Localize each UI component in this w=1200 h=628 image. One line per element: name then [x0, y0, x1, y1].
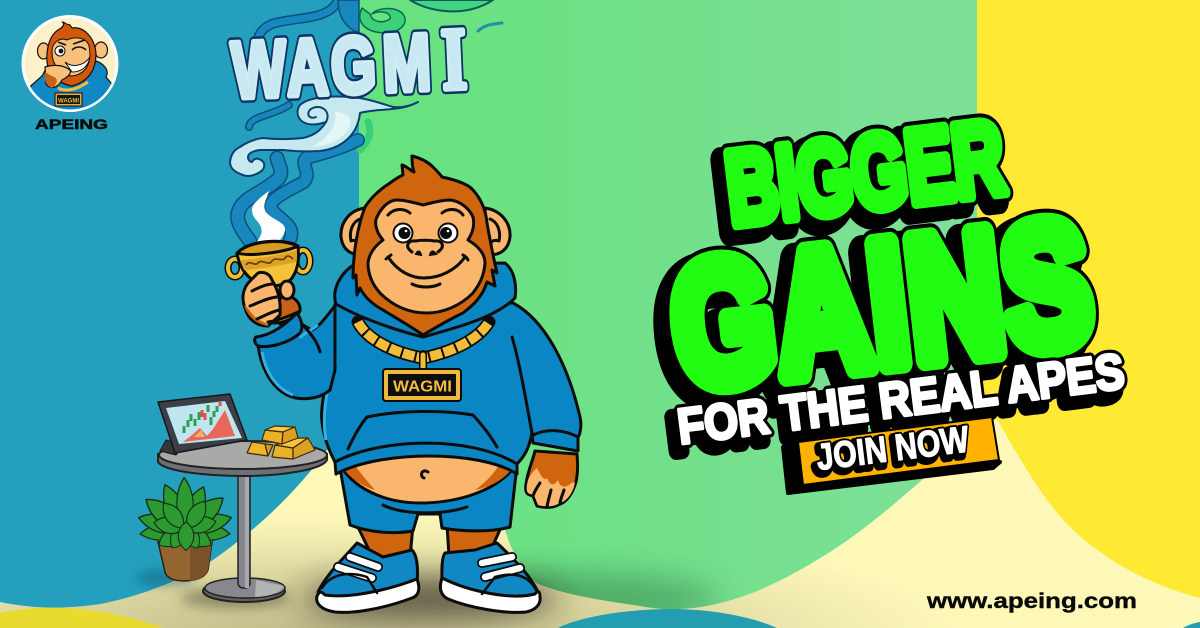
headline: BIGGER: BIGGER — [720, 98, 1011, 247]
hoodie details — [324, 337, 578, 464]
thumb — [280, 281, 294, 299]
headline: BIGGER: BIGGER — [713, 106, 1003, 255]
panel: yellow background — [977, 0, 1200, 598]
heading: WAGMI smoke lettering — [230, 10, 469, 117]
logo wordmark: APEING — [35, 116, 108, 132]
logo monkey illustration: WAGMI — [58, 98, 79, 104]
wisp: left steam strand — [238, 158, 281, 241]
hood — [335, 263, 516, 337]
cup rim — [237, 242, 298, 254]
tablet — [158, 394, 247, 455]
pot — [158, 535, 213, 581]
logo: APEING badge — [23, 16, 120, 132]
shorts — [340, 465, 517, 533]
chain plate — [383, 369, 461, 401]
headline: FOR THE REAL APES: FOR THE REAL APES — [674, 343, 1127, 455]
golden cup — [228, 241, 310, 315]
headline: GAINS: GAINS — [652, 193, 1093, 434]
button label: JOIN NOW — [814, 419, 971, 479]
cup band — [240, 250, 297, 270]
headline: FOR THE REAL APES: FOR THE REAL APES — [667, 351, 1120, 463]
shadow: ground shadow under feet — [300, 578, 560, 618]
WAGMI fill layer: WAGMI — [230, 10, 469, 117]
button face — [798, 417, 999, 485]
headline: FOR THE REAL APES: FOR THE REAL APES — [674, 343, 1127, 455]
wisp: upper blob left — [338, 0, 359, 33]
leaves — [136, 477, 234, 552]
panel: green background — [359, 0, 977, 609]
character: ape in blue hoodie — [228, 156, 581, 612]
cup stem — [273, 280, 283, 315]
shape: yellow bottom-left blob — [0, 608, 163, 628]
right hand — [526, 451, 578, 507]
cup foot — [268, 312, 298, 323]
shape: teal bottom-right corner — [1183, 622, 1200, 628]
wisp: top right swirl — [410, 0, 493, 11]
shape: teal bottom blob — [558, 609, 777, 628]
plant in pot — [136, 477, 234, 581]
smoke: big light swirl — [230, 96, 418, 176]
chart: red mountain — [183, 410, 235, 442]
button shadow — [783, 440, 1000, 493]
right shoe — [440, 543, 540, 612]
headline: BIGGER: BIGGER — [720, 98, 1011, 247]
face — [368, 200, 485, 313]
smoke: inner spiral — [308, 107, 328, 122]
left shoe — [317, 543, 419, 612]
legs — [357, 525, 502, 560]
left ear — [341, 208, 365, 254]
panel: blue background — [0, 0, 359, 608]
hand back patch — [276, 296, 300, 324]
wisp: small mid strand — [249, 105, 289, 127]
head fur — [353, 156, 497, 335]
chain plate: WAGMI — [393, 378, 452, 396]
finger lines — [250, 284, 279, 319]
fist shade — [244, 305, 268, 326]
smile — [386, 255, 468, 287]
wisp: green lower strand — [360, 122, 370, 150]
brows — [388, 209, 463, 215]
website url: www.apeing.com — [926, 590, 1137, 613]
right ear — [485, 208, 510, 254]
WAGMI outline layer: WAGMI — [230, 10, 469, 117]
button label: JOIN NOW — [814, 419, 971, 479]
cup bowl — [237, 241, 298, 286]
cup handles — [228, 250, 310, 277]
steam: white core — [252, 191, 285, 243]
wisp: right steam strand — [271, 140, 358, 240]
headline: GAINS: GAINS — [662, 183, 1103, 425]
smoke: steam wisps rising from cup — [230, 0, 502, 243]
wisp: upper left strand — [257, 0, 338, 55]
wisp: small right stroke — [478, 23, 502, 31]
button: JOIN NOW — [783, 417, 1000, 493]
hand holding cup — [243, 272, 300, 326]
gold bars — [247, 426, 315, 459]
raised arm — [258, 306, 335, 399]
smoke: swirl highlight — [312, 112, 350, 147]
shadow: green ground shadow — [518, 558, 726, 610]
table stand — [203, 472, 285, 602]
headline block — [652, 98, 1127, 493]
shadow: cream floor shading — [0, 500, 1200, 628]
logo circle — [23, 16, 117, 110]
table with tablet and gold — [158, 394, 327, 602]
headline: GAINS: GAINS — [662, 183, 1103, 425]
gold chain — [358, 322, 489, 370]
hoodie body — [322, 303, 581, 474]
fist — [243, 272, 280, 326]
shadow: table base shadow — [180, 588, 290, 608]
shadow: plant pot shadow — [135, 572, 195, 584]
table top — [158, 441, 327, 476]
chart: candles — [184, 402, 220, 433]
belly — [342, 453, 512, 503]
button label: JOIN NOW — [811, 422, 968, 482]
eyes — [394, 224, 458, 242]
sleeve cuff — [255, 313, 302, 346]
wisp: green swirl — [360, 8, 405, 33]
pot shading — [190, 535, 213, 581]
shorts fold — [383, 505, 467, 513]
nose — [408, 240, 442, 255]
